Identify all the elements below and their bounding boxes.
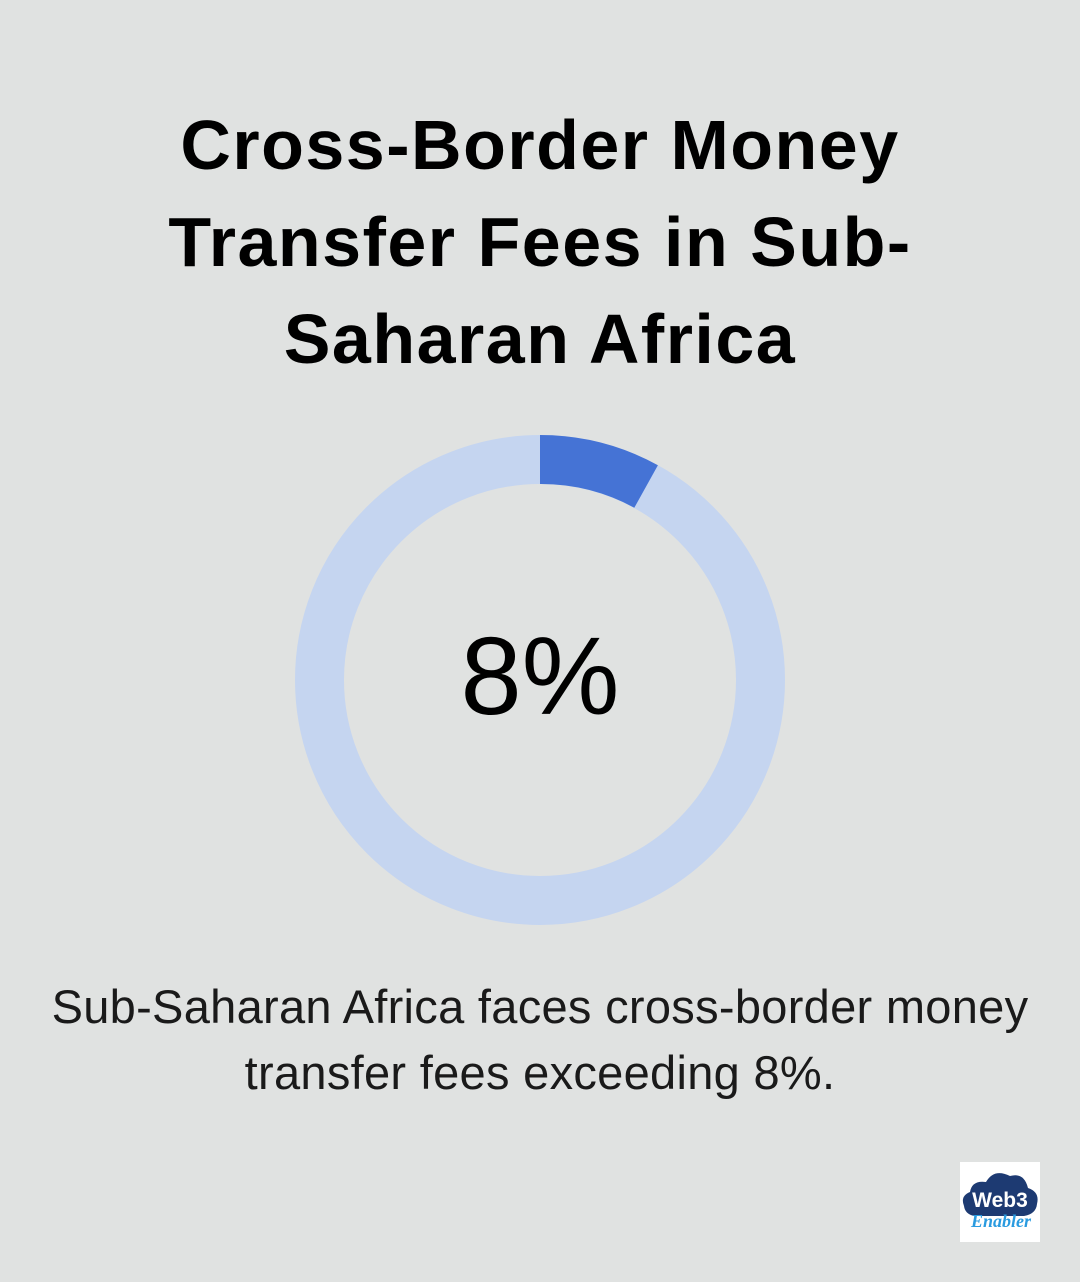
- logo: Web3: [972, 1189, 1028, 1212]
- title: [168, 106, 912, 378]
- caption: transfer fees exceeding 8%.: [245, 1046, 835, 1099]
- title: Transfer Fees in Sub-: [168, 203, 912, 281]
- logo: [960, 1162, 1040, 1242]
- arc: 8% segment: [540, 435, 658, 508]
- caption: Sub-Saharan Africa faces cross-border money: [52, 980, 1028, 1033]
- logo: Enabler: [970, 1211, 1032, 1231]
- center value: 8%: [461, 615, 619, 738]
- caption: [52, 980, 1028, 1099]
- title: Saharan Africa: [284, 300, 796, 378]
- title: Cross-Border Money: [180, 106, 900, 184]
